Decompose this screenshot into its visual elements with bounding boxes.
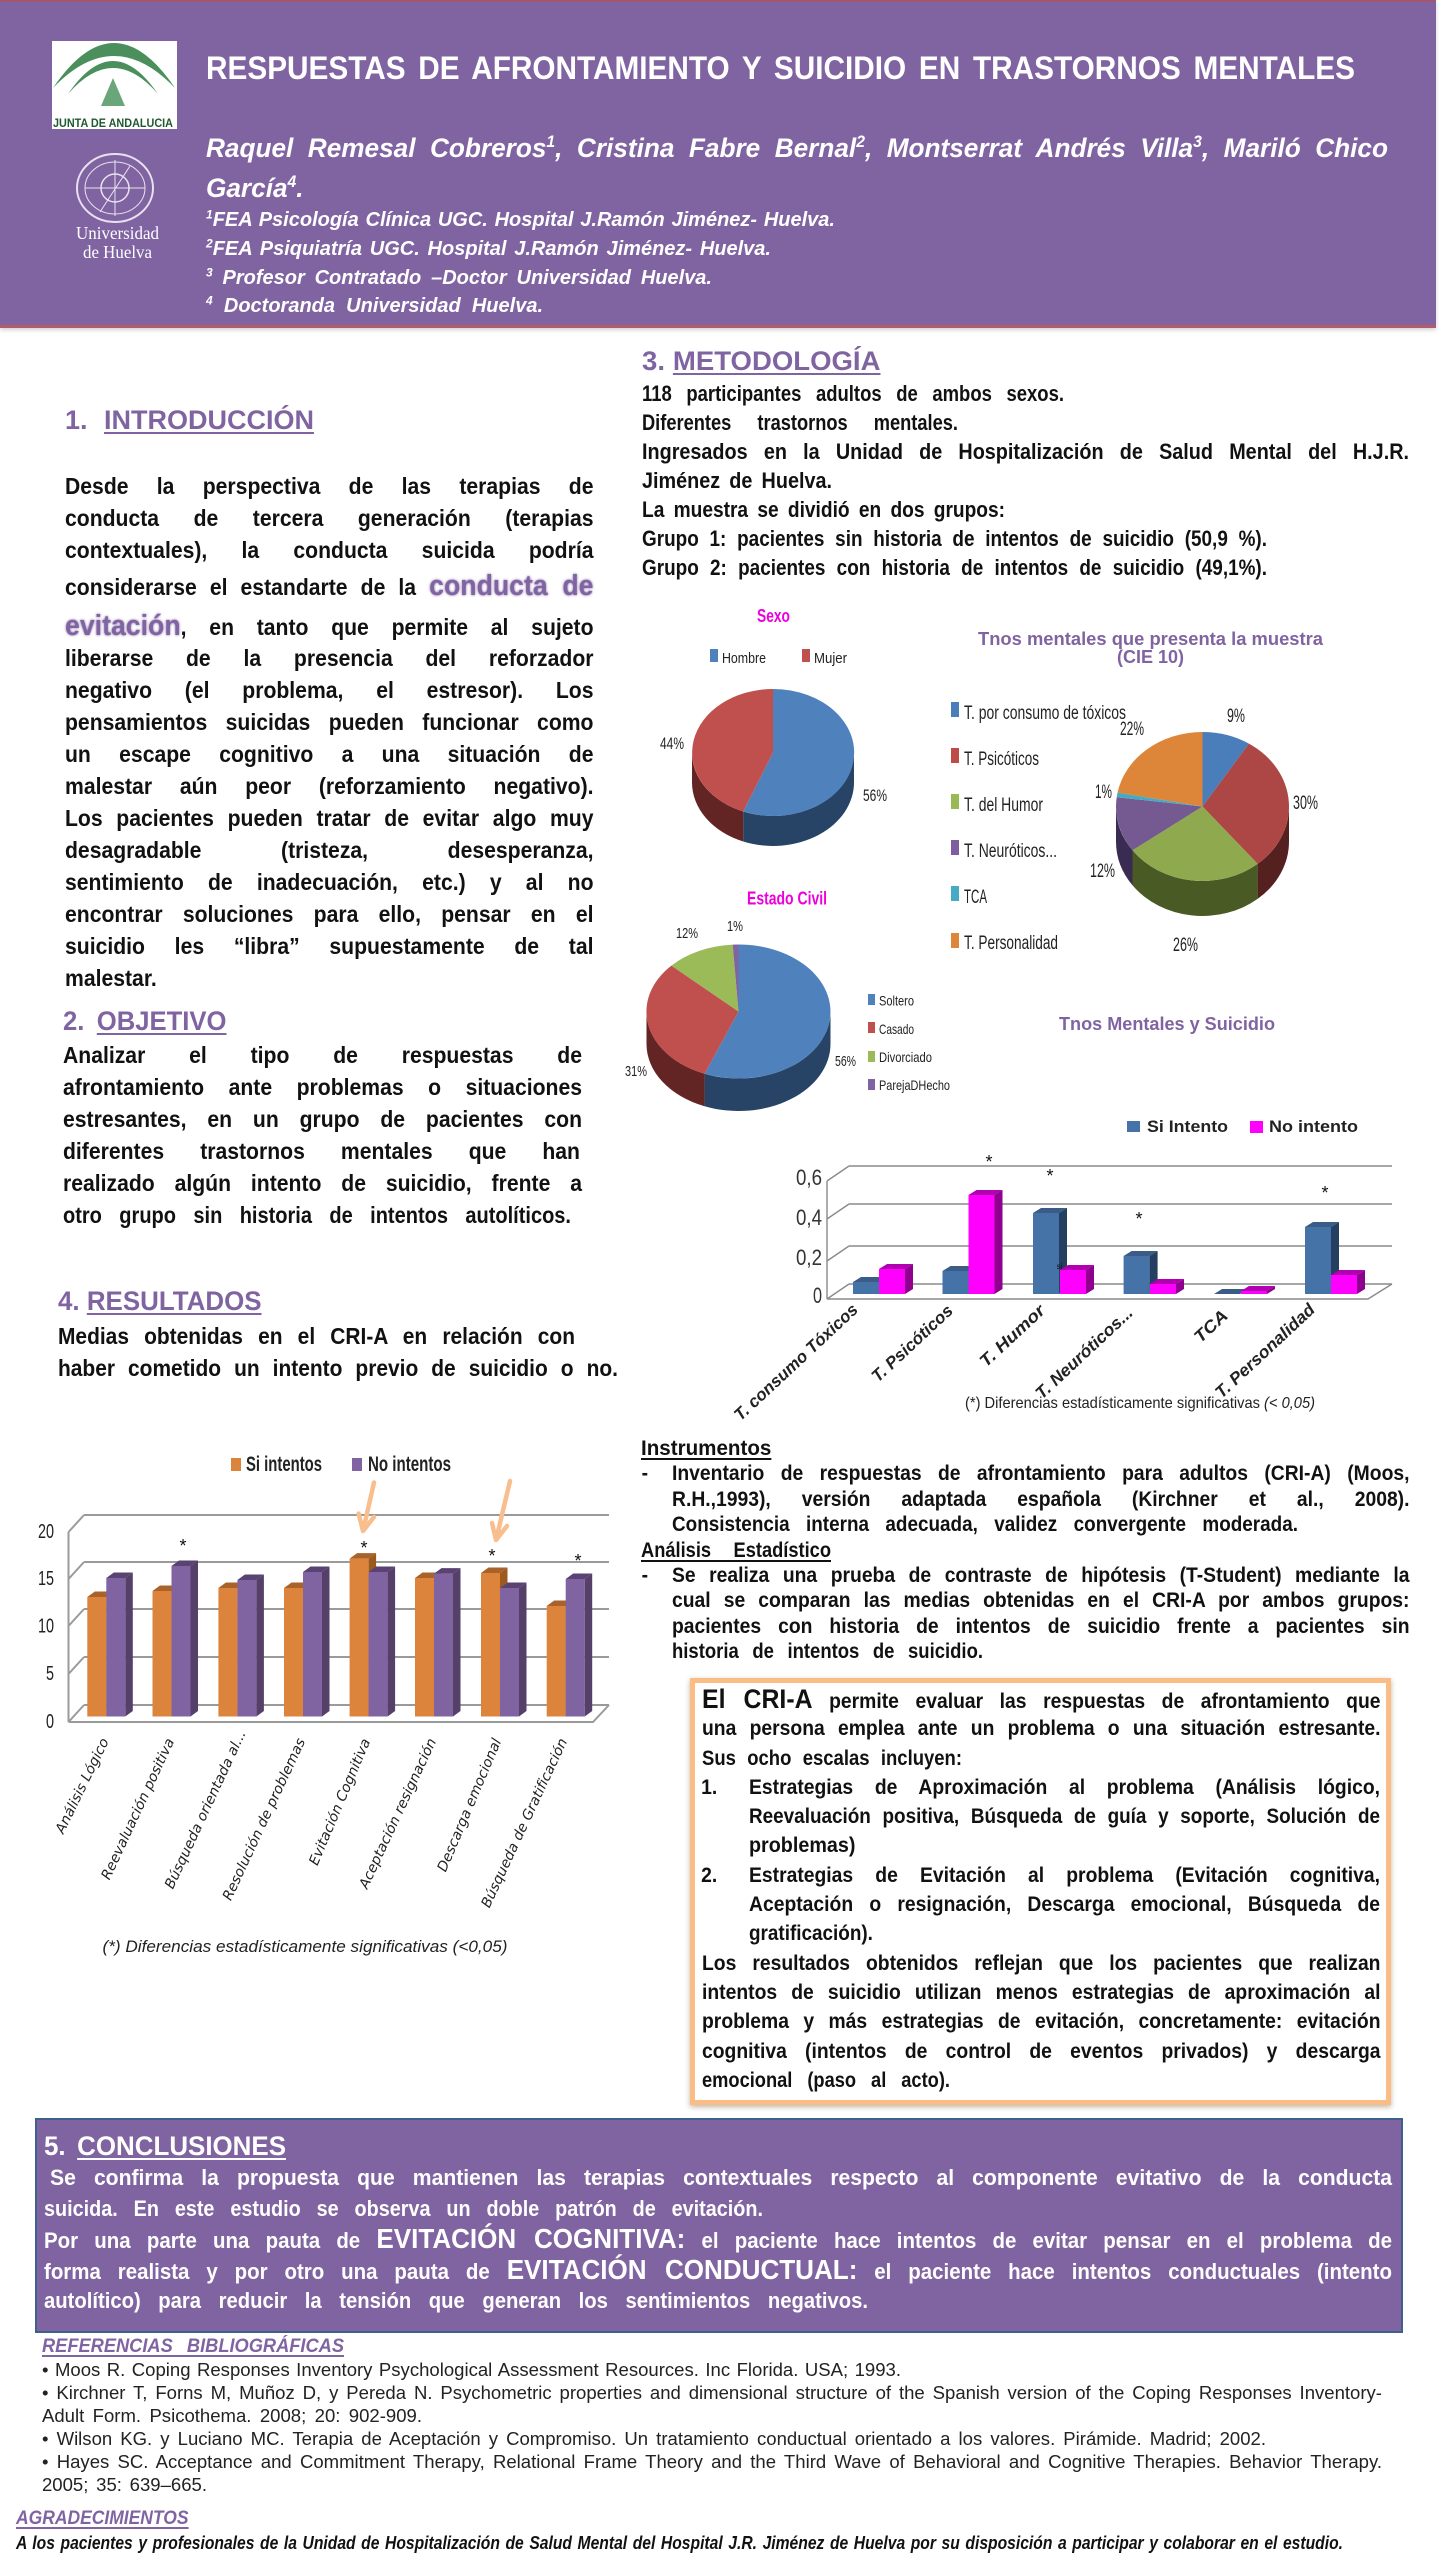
text block: objetivo: estresantes, en un grupo de pacientes con — [63, 1106, 582, 1132]
axis labels: 0,6 — [796, 1165, 822, 1190]
text block: introducción: un escape cognitivo a una situación de — [65, 741, 593, 767]
significance stars: * — [574, 1551, 582, 1571]
chart title: (CIE 10) — [1117, 647, 1184, 667]
category labels: Búsqueda orientada al... — [162, 1728, 250, 1891]
data labels: 12% — [1090, 861, 1115, 882]
text block: introducción: pensamientos suicidas pueden funcionar como — [65, 709, 593, 735]
data labels: 1% — [1095, 782, 1112, 803]
category labels: Descarga emocional — [435, 1736, 505, 1874]
category labels: Evitación Cognitiva — [306, 1736, 374, 1868]
category labels: Reevaluación positiva — [99, 1736, 178, 1882]
callout text: Los resultados obtenidos reflejan que los pacientes que realizan — [702, 1952, 1380, 1975]
data labels — [660, 734, 887, 805]
category labels — [52, 1728, 571, 1910]
arrow: evitación cognitiva — [359, 1482, 374, 1531]
legend: Si Intento — [1147, 1117, 1228, 1136]
chart title: Tnos mentales que presenta la muestra — [978, 629, 1324, 649]
significance stars — [179, 1536, 582, 1571]
legend: T. del Humor — [964, 795, 1043, 816]
category labels: TCA — [1190, 1306, 1232, 1347]
category labels — [730, 1300, 1319, 1424]
axis labels: 5 — [46, 1663, 54, 1685]
data labels: 26% — [1173, 935, 1198, 956]
text block: introducción: conducta de tercera generación (terapias — [65, 505, 593, 531]
significance stars: * — [360, 1538, 368, 1558]
text block: introducción: considerarse el estandarte de la conducta de — [65, 570, 593, 602]
chart title: Sexo — [757, 606, 790, 626]
affiliations — [206, 207, 835, 317]
text block: referencias: • Hayes SC. Acceptance and Commitment Therapy, Relational Frame Theory and the Third Wave of Behavioral and Cognitive Therapies. Behavior Therapy. — [42, 2452, 1382, 2472]
text block: metodología: 118 participantes adultos de ambos sexos. — [642, 381, 1063, 406]
heading: 5. Conclusiones: 5. CONCLUSIONES — [44, 2131, 286, 2161]
affiliations: 1FEA Psicología Clínica UGC. Hospital J.Ramón Jiménez- Huelva. — [206, 207, 835, 231]
text block: introducción: encontrar soluciones para ello, pensar en el — [65, 901, 593, 927]
text block: introducción: suicidio les “libra” supuestamente de tal — [65, 933, 593, 959]
significance stars: * — [985, 1152, 993, 1172]
legend: TCA — [964, 887, 987, 908]
legend — [710, 649, 847, 667]
legend: T. Personalidad — [964, 933, 1058, 954]
category labels: Análisis Lógico — [52, 1736, 113, 1837]
pie chart: sexo — [660, 606, 887, 846]
legend: Mujer — [814, 650, 847, 667]
text block: metodología: Grupo 2: pacientes con historia de intentos de suicidio (49,1%). — [642, 555, 1266, 580]
text block: objetivo: Analizar el tipo de respuestas de — [63, 1042, 582, 1068]
text block: resultados: Medias obtenidas en el CRI-A en relación con — [58, 1323, 575, 1349]
legend: Hombre — [722, 650, 766, 667]
legend — [951, 702, 1126, 954]
legend: T. Neuróticos... — [964, 841, 1057, 862]
axis labels: 15 — [38, 1568, 54, 1590]
logo: Junta de Andalucia: JUNTA DE ANDALUCIA — [53, 116, 173, 130]
text block: referencias: Adult Form. Psicothema. 2008; 20: 902-909. — [42, 2406, 422, 2426]
legend: Casado — [879, 1021, 914, 1037]
text block: objetivo: afrontamiento ante problemas o situaciones — [63, 1074, 582, 1100]
text block: introducción: evitación, en tanto que permite al sujeto — [65, 610, 593, 642]
legend — [868, 992, 950, 1093]
bars: no intentos — [106, 1560, 592, 1716]
significance stars: si — [1057, 1262, 1063, 1271]
text block: introducción: malestar aún peor (reforzamiento negativo). — [65, 773, 593, 799]
text block: resultados: haber cometido un intento previo de suicidio o no. — [58, 1355, 618, 1381]
logo: Universidad de Huelva: de Huelva — [83, 242, 152, 262]
callout text: Aceptación o resignación, Descarga emocional, Búsqueda de — [749, 1893, 1380, 1916]
callout: CRI-A box — [690, 1678, 1391, 2105]
text block: metodología: Jiménez de Huelva. — [642, 468, 831, 493]
callout text: 1. — [701, 1776, 717, 1799]
legend: No intento — [1269, 1117, 1358, 1136]
conclusions text: Por una parte una pauta de EVITACIÓN COGNITIVA: el paciente hace intentos de evitar pensar en el problema de — [44, 2223, 1392, 2254]
callout text: El CRI-A permite evaluar las respuestas de afrontamiento que — [702, 1684, 1380, 1714]
axis labels: 10 — [38, 1616, 54, 1638]
axis labels — [38, 1521, 54, 1733]
text block: objetivo — [63, 1042, 582, 1228]
significance stars: * — [1321, 1183, 1329, 1203]
pie slices — [646, 944, 831, 1111]
chart title — [978, 629, 1324, 667]
callout text: intentos de suicidio utilizan menos estrategias de aproximación al — [702, 1981, 1380, 2004]
conclusions text: suicida. En este estudio se observa un doble patrón de evitación. — [44, 2196, 763, 2221]
authors — [206, 133, 1388, 203]
callout text — [701, 1684, 1381, 2092]
chart title: Estado Civil — [747, 888, 827, 908]
data labels: 56% — [835, 1053, 856, 1070]
data labels: 1% — [727, 918, 743, 935]
axis labels: 0 — [813, 1283, 822, 1308]
legend: Soltero — [879, 992, 914, 1008]
callout text: Estrategias de Evitación al problema (Evitación cognitiva, — [749, 1864, 1380, 1887]
callout text: una persona emplea ante un problema o una situación estresante. — [702, 1717, 1380, 1740]
significance stars — [985, 1152, 1329, 1271]
category labels: T. Psicóticos — [868, 1301, 957, 1386]
text block: instrumentos y análisis estadístico: pacientes con historia de intentos de suicidio frente a pacientes sin — [672, 1615, 1409, 1638]
text block: introducción: liberarse de la presencia del reforzador — [65, 645, 593, 671]
category labels: Aceptación resignación — [356, 1736, 440, 1892]
conclusions text: forma realista y por otro una pauta de EVITACIÓN CONDUCTUAL: el paciente hace intentos conductuales (intento — [44, 2254, 1392, 2285]
data labels: 30% — [1293, 793, 1318, 814]
text block: objetivo: realizado algún intento de suicidio, frente a — [63, 1170, 582, 1196]
text block: agradecimientos: A los pacientes y profesionales de la Unidad de Hospitalización de Salud Mental del Hospital J.R. Jiménez de Huelva por su disposición a participar y colaborar en el estudio. — [16, 2533, 1343, 2553]
bar chart: trastornos mentales y suicidio — [730, 1014, 1392, 1424]
axis labels: 20 — [38, 1521, 54, 1543]
text block: introducción: sentimiento de inadecuación, etc.) y al no — [65, 869, 593, 895]
text block: introducción: negativo (el problema, el estresor). Los — [65, 677, 593, 703]
chart title: Tnos Mentales y Suicidio — [1059, 1014, 1275, 1034]
axis labels — [796, 1165, 822, 1308]
bar chart: medias CRI-A — [38, 1453, 610, 1956]
text block: instrumentos y análisis estadístico: Se realiza una prueba de contraste de hipótesis (T-Student) mediante la — [672, 1564, 1409, 1587]
text block: instrumentos y análisis estadístico: - — [641, 1462, 648, 1485]
pie slices — [692, 689, 854, 846]
legend: T. Psicóticos — [964, 749, 1039, 770]
significance stars: * — [179, 1536, 187, 1556]
data labels: 31% — [625, 1063, 647, 1080]
callout text: Sus ocho escalas incluyen: — [702, 1747, 961, 1770]
callout text: Estrategias de Aproximación al problema (Análisis lógico, — [749, 1776, 1380, 1799]
axis labels: 0,2 — [796, 1245, 822, 1270]
title: RESPUESTAS DE AFRONTAMIENTO Y SUICIDIO EN TRASTORNOS MENTALES — [206, 50, 1355, 86]
category labels: Resolución de problemas — [220, 1736, 309, 1903]
affiliations: 4 Doctoranda Universidad Huelva. — [206, 294, 543, 317]
text block: metodología: Diferentes trastornos mentales. — [642, 410, 957, 435]
text block: metodología: Ingresados en la Unidad de Hospitalización de Salud Mental del H.J.R. — [642, 439, 1408, 464]
callout text: gratificación). — [749, 1922, 873, 1945]
heading: 1. Introducción: 1. INTRODUCCIÓN — [65, 405, 314, 435]
text block: objetivo: otro grupo sin historia de intentos autolíticos. — [63, 1202, 571, 1228]
text block: referencias — [42, 2360, 1382, 2495]
affiliations: 3 Profesor Contratado –Doctor Universidad Huelva. — [206, 265, 712, 289]
text block: instrumentos y análisis estadístico: R.H.,1993), versión adaptada española (Kirchner et al., 2008). — [672, 1488, 1409, 1511]
footnote: (*) Diferencias estadísticamente significativas (< 0,05) — [965, 1395, 1315, 1412]
text block: referencias: • Moos R. Coping Responses Inventory Psychological Assessment Resources. Inc Florida. USA; 1993. — [42, 2360, 901, 2380]
text block: instrumentos y análisis estadístico — [641, 1437, 1410, 1663]
logo: Universidad de Huelva — [76, 153, 159, 262]
data labels: 44% — [660, 734, 684, 753]
callout text: problemas) — [749, 1834, 855, 1857]
significance stars: * — [1046, 1166, 1054, 1186]
legend: Divorciado — [879, 1049, 932, 1065]
legend: ParejaDHecho — [879, 1077, 950, 1093]
axis labels: 0 — [46, 1711, 54, 1733]
callout text: emocional (paso al acto). — [702, 2069, 949, 2092]
conclusions text: autolítico) para reducir la tensión que generan los sentimientos negativos. — [44, 2288, 868, 2313]
pie slices — [1116, 732, 1289, 916]
bars: si intentos — [87, 1553, 573, 1716]
bars: no intento — [879, 1190, 1365, 1294]
legend: Si intentos — [246, 1453, 322, 1476]
text block: instrumentos y análisis estadístico: Consistencia interna adecuada, validez convergente moderada. — [672, 1513, 1297, 1536]
heading: 4. Resultados: 4. RESULTADOS — [58, 1286, 262, 1316]
callout text: 2. — [701, 1864, 717, 1887]
affiliations: 2FEA Psiquiatría UGC. Hospital J.Ramón Jiménez- Huelva. — [206, 236, 771, 260]
pie chart: estado civil — [625, 888, 950, 1111]
heading: 3. Metodología: 3. METODOLOGÍA — [642, 346, 880, 376]
category labels: T. Humor — [976, 1300, 1050, 1371]
footnote: (*) Diferencias estadísticamente significativas (<0,05) — [102, 1937, 508, 1956]
legend — [1127, 1117, 1358, 1136]
data labels: 56% — [863, 786, 887, 805]
text block: instrumentos y análisis estadístico: historia de intentos de suicidio. — [672, 1640, 982, 1663]
axis labels: 0,4 — [796, 1205, 822, 1230]
arrow: descarga emocional — [492, 1481, 510, 1540]
text block: referencias: • Kirchner T, Forns M, Muñoz D, y Pereda N. Psychometric properties and dimensional structure of the Spanish version of the Coping Responses Inventory- — [42, 2383, 1382, 2403]
text block: introducción: Desde la perspectiva de las terapias de — [65, 473, 593, 499]
text block: metodología: La muestra se dividió en dos grupos: — [642, 497, 1004, 522]
subheading: instrumentos: Instrumentos — [641, 1437, 771, 1460]
text block: introducción: Los pacientes pueden tratar de evitar algo muy — [65, 805, 593, 831]
data labels: 9% — [1227, 706, 1245, 727]
text block: referencias: • Wilson KG. y Luciano MC. Terapia de Aceptación y Compromiso. Un tratamiento conductual orientado a los valores. Pirámide. Madrid; 2002. — [42, 2429, 1266, 2449]
text block: instrumentos y análisis estadístico: Inventario de respuestas de afrontamiento para adultos (CRI-A) (Moos, — [672, 1462, 1409, 1485]
heading: referencias bibliográficas: REFERENCIAS BIBLIOGRÁFICAS — [42, 2336, 344, 2357]
conclusions text: Se confirma la propuesta que mantienen las terapias contextuales respecto al componente evitativo de la conducta — [50, 2165, 1392, 2190]
heading: agradecimientos: AGRADECIMIENTOS — [16, 2508, 189, 2529]
text block: referencias: 2005; 35: 639–665. — [42, 2475, 207, 2495]
text block: objetivo: diferentes trastornos mentales que han — [63, 1138, 580, 1164]
callout text: Reevaluación positiva, Búsqueda de guía y soporte, Solución de — [749, 1805, 1380, 1828]
text block: resultados — [58, 1323, 618, 1381]
significance stars: * — [488, 1546, 496, 1566]
legend: T. por consumo de tóxicos — [964, 703, 1126, 724]
text block: introducción — [64, 473, 594, 991]
pie chart: trastornos mentales CIE 10 — [951, 629, 1324, 956]
category labels: Búsqueda de Gratificación — [478, 1736, 571, 1910]
data labels — [625, 918, 856, 1080]
logo: Universidad de Huelva: Universidad — [76, 223, 159, 243]
significance stars: * — [1135, 1209, 1143, 1229]
data labels: 12% — [676, 925, 698, 942]
callout text: cognitiva (intentos de control de eventos privados) y descarga — [702, 2040, 1380, 2063]
text block: introducción: contextuales), la conducta suicida podría — [65, 537, 593, 563]
text block: introducción: desagradable (tristeza, desesperanza, — [65, 837, 593, 863]
panel: conclusiones — [35, 2118, 1403, 2333]
legend: No intentos — [368, 1453, 451, 1476]
callout text: problema y más estrategias de evitación, concretamente: evitación — [702, 2010, 1380, 2033]
authors: García4. — [206, 173, 304, 203]
subheading: análisis estadístico: Análisis Estadístico — [641, 1539, 831, 1562]
text block: introducción: malestar. — [65, 965, 156, 991]
logo: Junta de Andalucia — [52, 41, 177, 130]
category labels: T. Neuróticos... — [1032, 1303, 1137, 1403]
text block: metodología: Grupo 1: pacientes sin historia de intentos de suicidio (50,9 %). — [642, 526, 1266, 551]
bars: si intento — [853, 1208, 1339, 1294]
header banner — [0, 0, 1436, 328]
data labels: 22% — [1120, 719, 1144, 740]
category labels: T. consumo Tóxicos — [730, 1300, 862, 1424]
text block: instrumentos y análisis estadístico: cual se comparan las medias obtenidas en el CRI-A por ambos grupos: — [672, 1589, 1409, 1612]
category labels: T. Personalidad — [1211, 1300, 1319, 1402]
text block: metodología — [642, 381, 1408, 580]
data labels — [1090, 706, 1318, 956]
conclusions text — [44, 2165, 1392, 2313]
authors: Raquel Remesal Cobreros1, Cristina Fabre Bernal2, Montserrat Andrés Villa3, Mariló Chico — [206, 133, 1388, 163]
text block: instrumentos y análisis estadístico: - — [641, 1564, 648, 1587]
heading: 2. Objetivo: 2. OBJETIVO — [63, 1006, 226, 1036]
legend — [231, 1453, 451, 1476]
